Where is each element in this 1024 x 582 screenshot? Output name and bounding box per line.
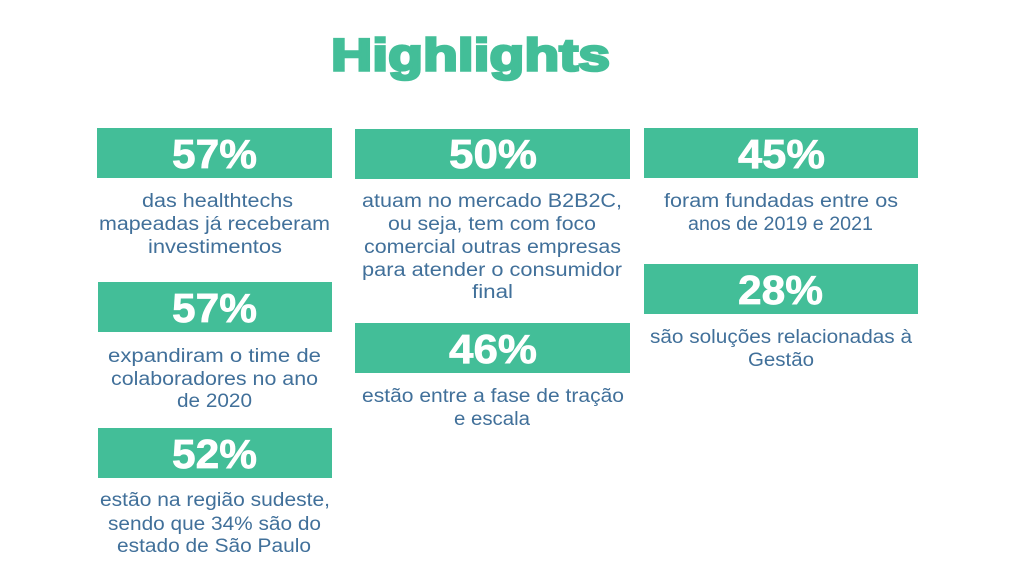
panel: 45% fundadas — [644, 128, 918, 235]
panel: 52% sudeste — [98, 428, 332, 557]
text block: sudeste: estado de São Paulo — [117, 536, 311, 557]
text block: sudeste — [100, 490, 330, 557]
text block: tração — [362, 386, 624, 430]
stat bar: 45% — [644, 128, 918, 178]
text block: colaboradores: expandiram o time de — [108, 346, 321, 367]
panel: 46% tração — [355, 323, 630, 430]
title: Highlights — [331, 30, 610, 80]
stat bar: 28% — [644, 264, 918, 314]
text block: investimentos: das healthtechs — [142, 191, 293, 212]
text block: colaboradores — [108, 346, 321, 412]
stat bar: 28%: 28% — [738, 267, 823, 313]
text block: sudeste: estão na região sudeste, — [100, 490, 330, 511]
panel: 28% gestão — [644, 264, 918, 371]
text block: colaboradores: colaboradores no ano — [111, 369, 318, 390]
text block: investimentos: investimentos — [148, 237, 282, 258]
stat bar: 46%: 46% — [449, 326, 537, 372]
text block: fundadas: anos de 2019 e 2021 — [688, 214, 873, 235]
text block: tração: estão entre a fase de tração — [362, 386, 624, 407]
stat bar: 57%: 57% — [172, 131, 257, 177]
text block: gestão: são soluções relacionadas à — [650, 327, 912, 348]
text block: tração: e escala — [454, 409, 530, 430]
stat bar: 45%: 45% — [738, 131, 825, 177]
text block: B2B2C: comercial outras empresas — [364, 237, 621, 258]
text block: B2B2C: final — [472, 282, 513, 303]
text block: gestão: Gestão — [748, 350, 814, 371]
text block: investimentos — [99, 191, 330, 258]
panel: 57% colaboradores — [98, 282, 332, 412]
stat bar: 57% — [97, 128, 332, 178]
text block: colaboradores: de 2020 — [177, 391, 252, 412]
text block: fundadas: foram fundadas entre os — [664, 191, 898, 212]
stat bar: 57%: 57% — [172, 285, 257, 331]
stat bar: 50%: 50% — [449, 131, 537, 177]
text block: B2B2C: para atender o consumidor — [362, 260, 623, 281]
stat bar: 52%: 52% — [172, 431, 257, 477]
text block: investimentos: mapeadas já receberam — [99, 214, 330, 235]
text block: B2B2C: atuam no mercado B2B2C, — [362, 191, 622, 212]
stat bar: 52% — [98, 428, 332, 478]
text block: sudeste: sendo que 34% são do — [108, 514, 321, 535]
text block: gestão — [650, 327, 912, 371]
text block: B2B2C: ou seja, tem com foco — [388, 214, 596, 235]
panel: 50% B2B2C — [355, 129, 630, 303]
stat bar: 57% — [98, 282, 332, 332]
panel: 57% investimentos — [97, 128, 332, 258]
text block: B2B2C — [362, 191, 623, 303]
text block: fundadas — [664, 191, 898, 235]
stat bar: 50% — [355, 129, 630, 179]
stat bar: 46% — [355, 323, 630, 373]
